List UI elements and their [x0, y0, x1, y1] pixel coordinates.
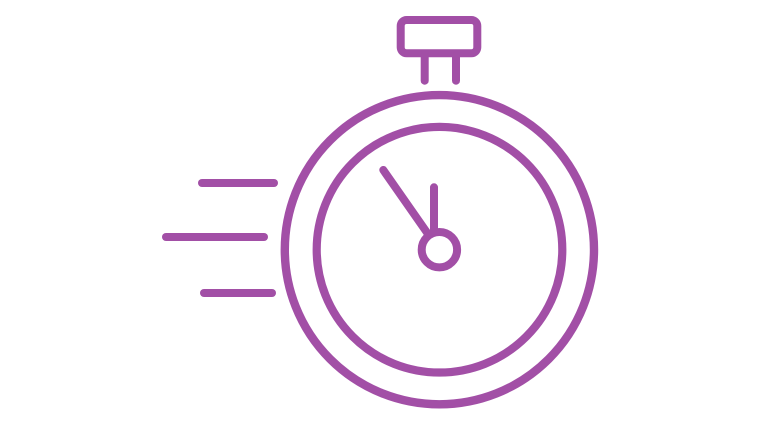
speed line bottom	[204, 289, 272, 297]
centre hub	[422, 232, 457, 267]
speed line top	[202, 179, 274, 187]
short clock hand	[430, 187, 438, 231]
long clock hand	[383, 170, 428, 234]
button stem right	[452, 56, 460, 81]
button stem left	[421, 56, 429, 81]
inner dial ring	[317, 127, 562, 372]
speed line middle	[166, 233, 264, 241]
outer case ring	[285, 95, 594, 404]
stopwatch top button	[401, 20, 477, 53]
